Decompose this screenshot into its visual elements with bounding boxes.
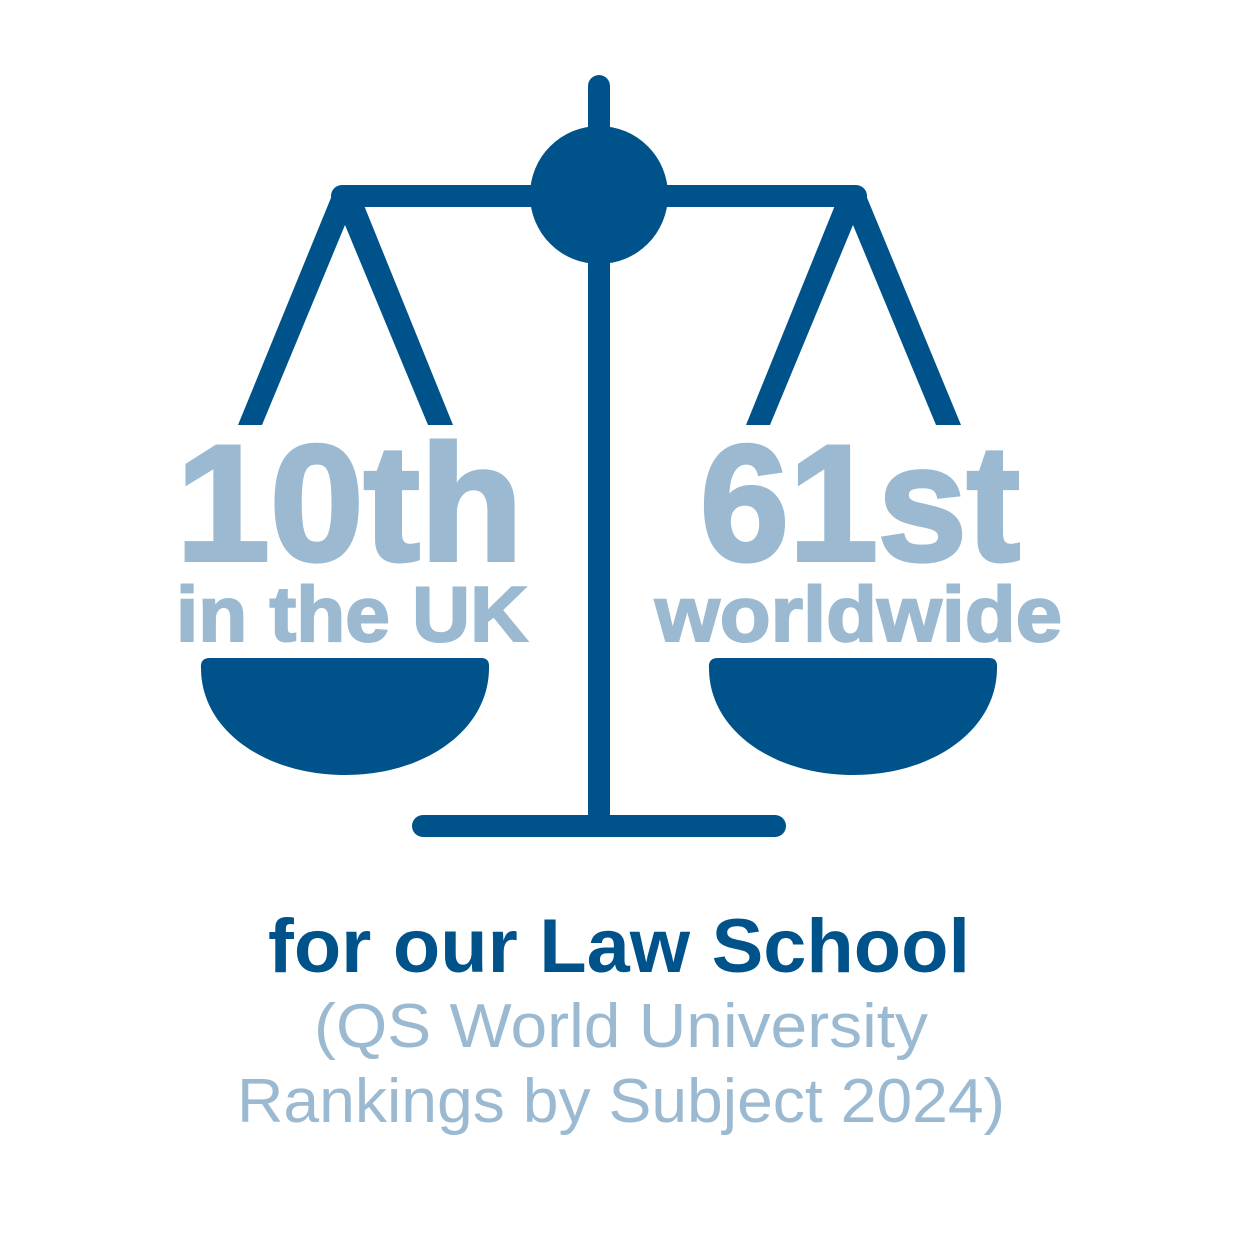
source text: (QS World University bbox=[314, 992, 928, 1061]
stat: 61st worldwide bbox=[654, 411, 1062, 658]
stat: 10th in the UK: in the UK bbox=[176, 570, 528, 658]
stat: 61st worldwide: 61st bbox=[700, 411, 1020, 595]
source text: Rankings by Subject 2024) bbox=[237, 1067, 1005, 1136]
heading: for our Law School: for our Law School bbox=[268, 904, 970, 989]
source text bbox=[237, 992, 1005, 1136]
icon: scales of justice bbox=[201, 86, 997, 826]
stat: 61st worldwide: worldwide bbox=[654, 570, 1062, 658]
stat: 10th in the UK: 10th bbox=[176, 411, 523, 595]
